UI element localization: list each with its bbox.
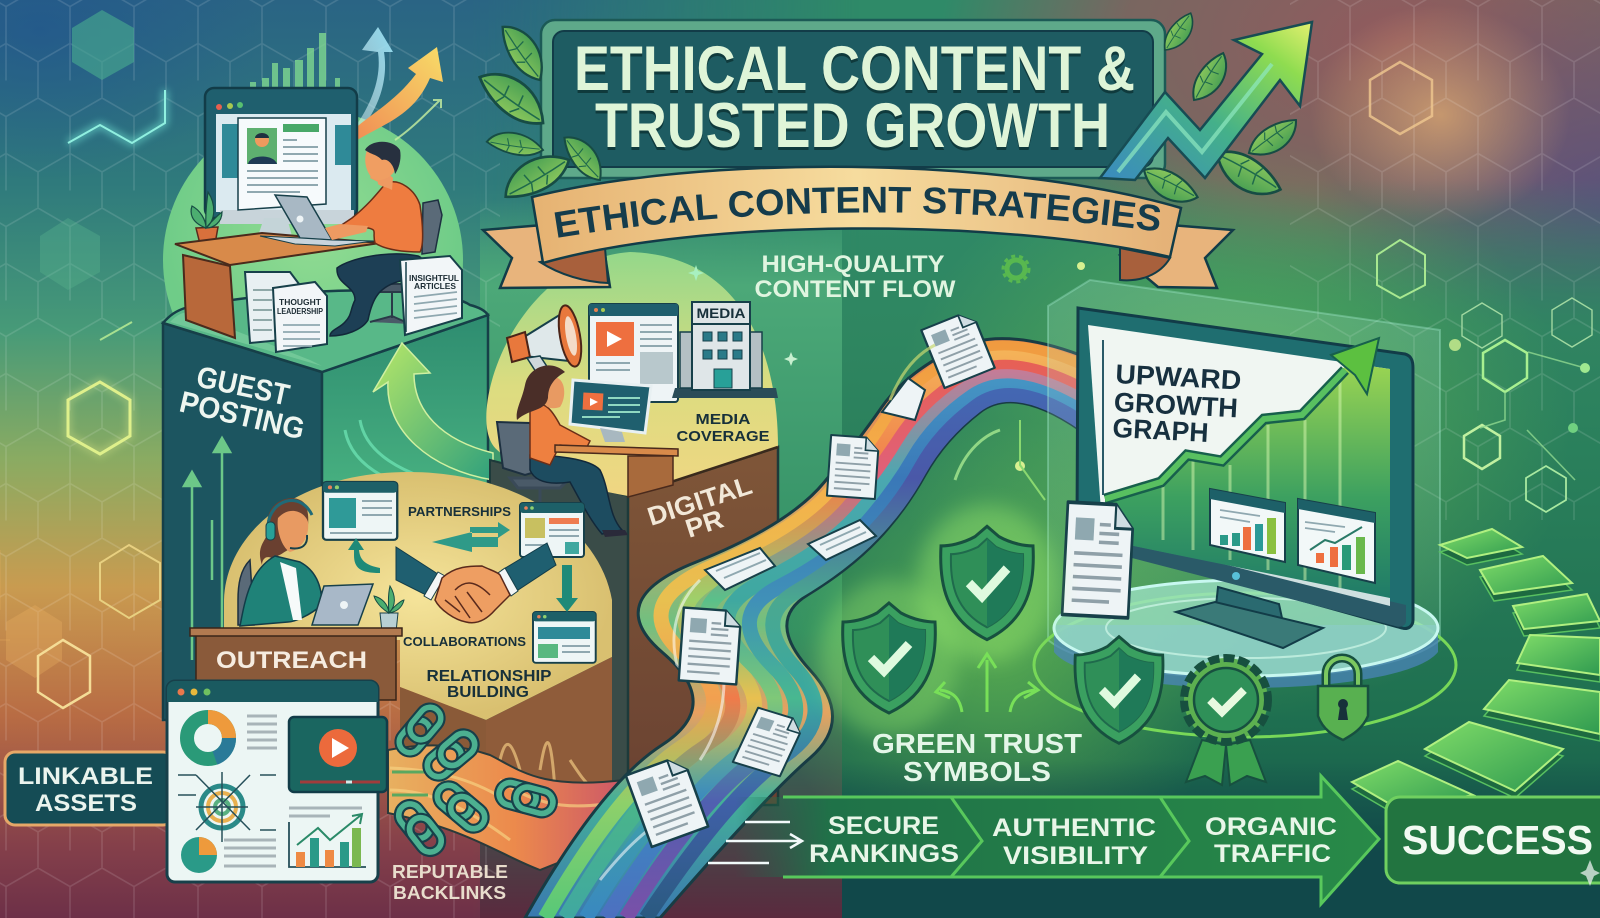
label: partnerships: PARTNERSHIPS bbox=[408, 504, 511, 519]
mini dashboard two bbox=[1298, 499, 1375, 583]
desk bbox=[175, 233, 380, 265]
panel: linkable assets dashboard bbox=[167, 681, 387, 882]
label: upward growth graph: UPWARD bbox=[1115, 359, 1242, 396]
label: reputable backlinks: BACKLINKS bbox=[393, 883, 506, 903]
laptop bbox=[312, 584, 373, 625]
label: relationship building: RELATIONSHIP bbox=[426, 668, 552, 685]
shield right bbox=[1075, 637, 1163, 743]
thought leadership papers bbox=[245, 272, 327, 352]
leaves around title bbox=[478, 12, 1302, 215]
desk bbox=[555, 445, 678, 497]
panel: linkable assets label: LINKABLE bbox=[18, 763, 153, 790]
hexagon pattern left bbox=[0, 0, 500, 918]
label: organic traffic: ORGANIC bbox=[1205, 813, 1337, 841]
illustration: digital pr workstation bbox=[497, 302, 778, 537]
small up arrows bbox=[936, 654, 1038, 712]
monitor body bbox=[1077, 308, 1413, 629]
insightful articles papers: ARTICLES bbox=[414, 281, 456, 291]
shield top bbox=[941, 526, 1033, 640]
chevron dividers bbox=[951, 797, 1189, 877]
label: guest posting: GUEST bbox=[194, 361, 292, 412]
label: green trust symbols bbox=[872, 728, 1082, 787]
orange rising arrow bbox=[333, 47, 443, 157]
shield left bbox=[843, 603, 935, 713]
title text bbox=[574, 34, 1135, 161]
title panel bbox=[541, 20, 1165, 178]
trust symbols bbox=[819, 505, 1368, 787]
success box: SUCCESS bbox=[1402, 817, 1593, 863]
chain links: reputable backlinks bbox=[394, 703, 555, 857]
success box bbox=[1386, 797, 1600, 886]
green glow circle behind guest post workstation bbox=[163, 110, 463, 410]
sparkles and gear bbox=[688, 256, 1085, 500]
label: relationship building bbox=[426, 668, 552, 701]
web window three bbox=[533, 612, 596, 663]
web window two bbox=[520, 503, 584, 557]
monitor stand bbox=[1176, 587, 1323, 648]
thought leadership papers: THOUGHT bbox=[279, 297, 322, 307]
panel: guest posting pedestal bbox=[163, 290, 488, 720]
donut chart bbox=[187, 717, 229, 759]
label: upward growth graph: GRAPH bbox=[1112, 413, 1209, 448]
glass case bbox=[1048, 280, 1440, 678]
web window one bbox=[323, 482, 397, 540]
mini growth bars bbox=[250, 33, 340, 92]
brown faces bbox=[400, 687, 486, 800]
label: reputable backlinks: REPUTABLE bbox=[392, 862, 508, 882]
monitor bbox=[205, 88, 357, 218]
plant bbox=[374, 586, 404, 632]
ribbon: backlink flow bbox=[388, 745, 640, 870]
laptop bbox=[275, 195, 332, 240]
label: media coverage: MEDIA bbox=[696, 411, 751, 428]
handshake bbox=[396, 543, 556, 623]
label: guest posting: POSTING bbox=[176, 386, 308, 446]
label: high-quality content flow bbox=[754, 251, 956, 303]
megaphone bbox=[507, 304, 585, 372]
banner: ethical content strategies bbox=[480, 166, 1236, 290]
mini growth chart bbox=[289, 814, 366, 867]
blue rising arrow bbox=[345, 27, 393, 145]
video player bbox=[289, 717, 387, 792]
label: authentic visibility bbox=[992, 814, 1156, 870]
panel: linkable assets label bbox=[5, 752, 173, 825]
chair and person bbox=[497, 365, 628, 537]
insightful articles papers bbox=[400, 256, 462, 335]
exchange arrows bbox=[432, 522, 510, 552]
title text: ETHICAL CONTENT & bbox=[574, 34, 1135, 104]
panel: digital pr pedestal bbox=[486, 252, 778, 805]
label: reputable backlinks bbox=[392, 862, 508, 903]
article on screen bbox=[238, 118, 326, 210]
label: authentic visibility: AUTHENTIC bbox=[992, 814, 1156, 842]
label: media coverage bbox=[676, 411, 770, 445]
label: secure rankings: RANKINGS bbox=[809, 840, 959, 868]
chair bbox=[422, 200, 442, 254]
label: secure rankings bbox=[809, 812, 959, 868]
label: upward growth graph: GROWTH bbox=[1113, 387, 1239, 423]
label: digital pr: DIGITAL bbox=[644, 470, 756, 532]
label: high-quality content flow: CONTENT FLOW bbox=[754, 276, 956, 303]
insightful articles papers: INSIGHTFUL bbox=[409, 273, 459, 283]
title text: TRUSTED GROWTH bbox=[595, 91, 1110, 161]
icon: big growth arrow bbox=[1100, 22, 1312, 180]
thought leadership papers: LEADERSHIP bbox=[277, 306, 323, 316]
label: secure rankings: SECURE bbox=[828, 812, 939, 840]
label: authentic visibility: VISIBILITY bbox=[1003, 842, 1148, 870]
flow arrow: ranking steps bbox=[708, 776, 1379, 904]
woman at laptop bbox=[238, 498, 373, 626]
label: outreach: OUTREACH bbox=[216, 647, 367, 674]
small arrows bbox=[348, 538, 578, 612]
document bbox=[1062, 502, 1134, 618]
label: high-quality content flow: HIGH-QUALITY bbox=[762, 251, 944, 278]
stairway to success bbox=[1352, 529, 1600, 817]
label: organic traffic bbox=[1205, 813, 1337, 868]
growth chart bbox=[1105, 345, 1390, 600]
illustration: guest post workstation bbox=[175, 27, 462, 352]
mini dashboard one bbox=[1210, 489, 1285, 562]
rosette badge bbox=[1184, 658, 1268, 785]
banner text bbox=[556, 212, 1162, 238]
hexagon pattern right bbox=[1290, 0, 1600, 520]
panel: growth monitor hologram bbox=[1034, 280, 1456, 737]
label: organic traffic: TRAFFIC bbox=[1214, 840, 1331, 868]
label: green trust symbols: GREEN TRUST bbox=[872, 728, 1082, 759]
arrows on guest posting pedestal bbox=[184, 438, 230, 660]
panel: linkable assets label: ASSETS bbox=[35, 790, 137, 817]
target diagram bbox=[178, 772, 276, 842]
plant bbox=[191, 192, 222, 244]
label: upward growth graph bbox=[1112, 359, 1242, 450]
label: guest posting bbox=[176, 361, 308, 446]
documents on the ribbon bbox=[626, 310, 995, 847]
label: digital pr: PR bbox=[682, 503, 727, 544]
icon: green curved up arrow bbox=[345, 343, 493, 498]
pie chart bbox=[181, 837, 217, 873]
banner: ethical content strategies: ETHICAL CONTENT STRATEGIES bbox=[554, 186, 1160, 238]
label: green trust symbols: SYMBOLS bbox=[903, 756, 1051, 787]
padlock bbox=[1318, 658, 1368, 740]
media web page bbox=[589, 304, 678, 402]
label: media coverage: COVERAGE bbox=[676, 428, 770, 445]
panel: outreach area bbox=[190, 472, 612, 800]
flow: high-quality content ribbon bbox=[525, 339, 1080, 918]
label: relationship building: BUILDING bbox=[447, 684, 529, 701]
label: collaborations: COLLABORATIONS bbox=[403, 634, 526, 649]
media building: MEDIA bbox=[696, 305, 746, 321]
desk bbox=[190, 628, 402, 700]
small monitor bbox=[570, 380, 651, 442]
person bbox=[325, 142, 424, 336]
platform bbox=[1034, 580, 1456, 737]
media building bbox=[672, 302, 778, 398]
speed lines bbox=[708, 822, 802, 863]
